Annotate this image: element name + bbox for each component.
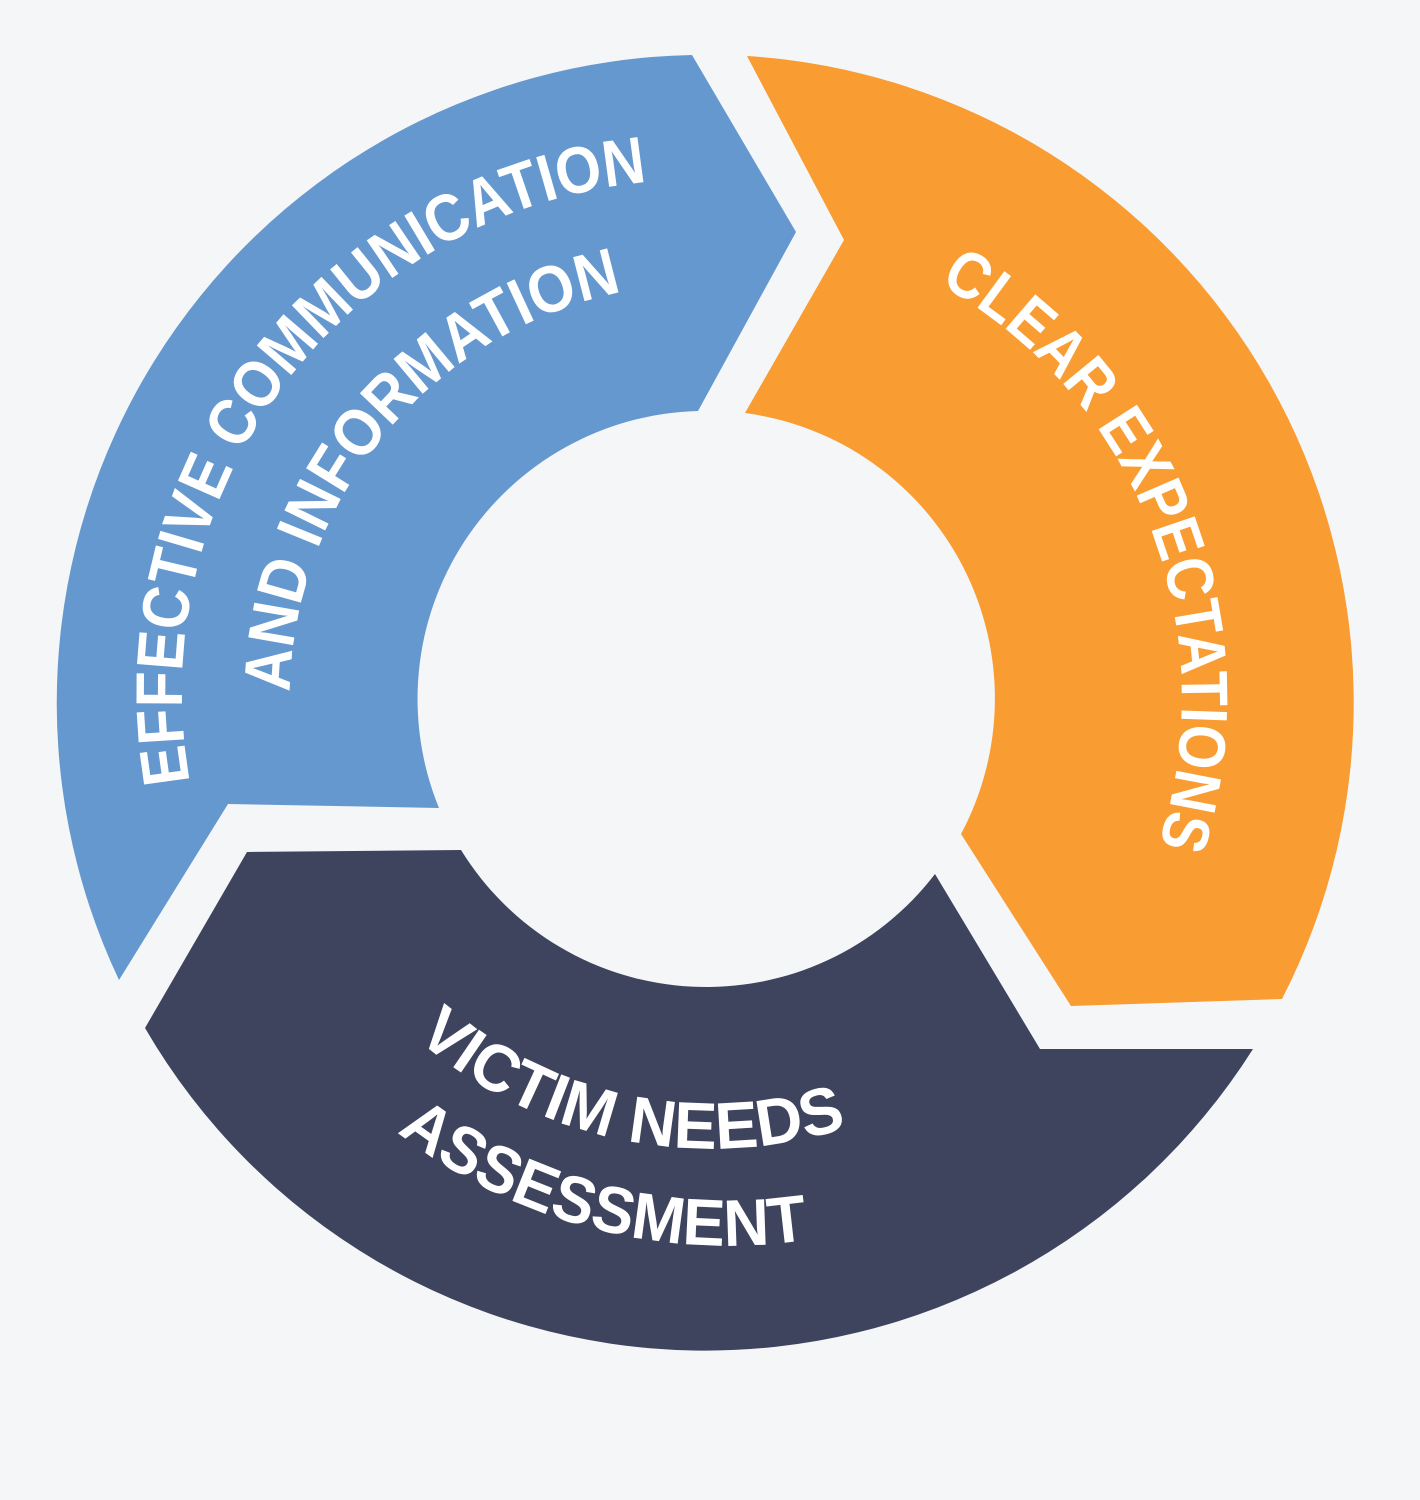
label: clear expectations: CLEAR EXPECTATIONS — [948, 252, 1228, 852]
label: assessment: ASSESSMENT — [398, 1106, 804, 1246]
segment: victim needs assessment — [145, 850, 1253, 1351]
label: effective communication: EFFECTIVE COMMUNICATION — [136, 137, 644, 784]
label: and information: AND INFORMATION — [245, 248, 618, 691]
segment: effective communication and information — [56, 55, 796, 980]
segment: clear expectations — [745, 56, 1354, 1006]
label: victim needs: VICTIM NEEDS — [428, 1003, 842, 1149]
